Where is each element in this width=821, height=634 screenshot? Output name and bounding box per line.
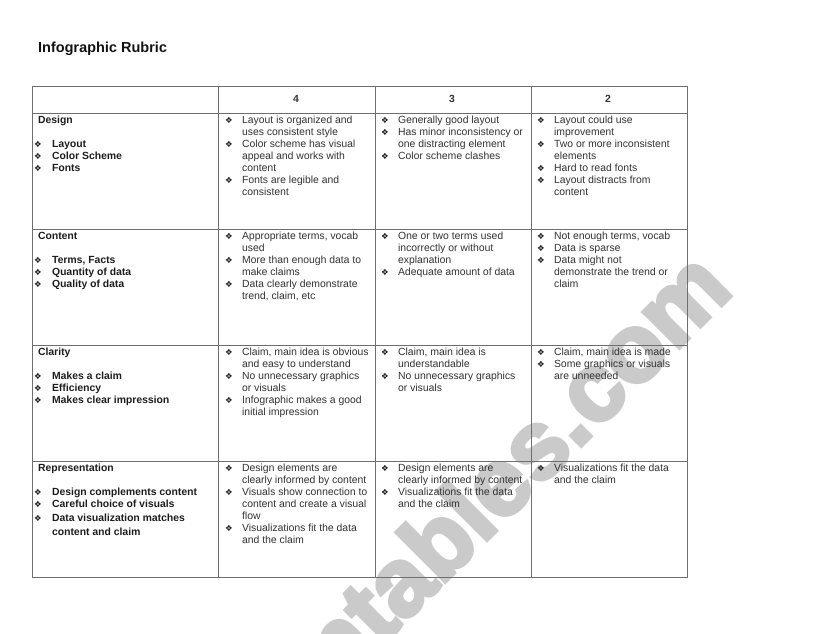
Content score 4: More than enough data to [242,255,361,266]
Content score 3: ❖ [381,268,389,278]
Content score 4: trend, claim, etc [242,291,315,302]
Content score 4: Data clearly demonstrate [242,279,358,290]
Design score 4: content [242,163,276,174]
Content score 3: ❖ [381,232,389,242]
Content score 2: claim [554,279,578,290]
Content score 2 [537,231,670,290]
Design score 4 [225,115,355,198]
row label: Representation: Design complements content [52,487,197,498]
row label: Content [34,231,132,290]
Representation score 2: Visualizations fit the data [554,463,669,474]
Representation score 4: ❖ [225,524,233,534]
row label: Clarity: ❖ [34,384,42,394]
Clarity score 2: Claim, main idea is made [554,347,671,358]
Clarity score 2: ❖ [537,348,545,358]
title: Infographic Rubric [38,40,167,56]
Clarity score 4: Infographic makes a good [242,395,362,406]
Design score 3: ❖ [381,128,389,138]
Content score 4: ❖ [225,232,233,242]
Clarity score 2: are unneeded [554,371,618,382]
Content score 4: Appropriate terms, vocab [242,231,358,242]
Design score 2: Layout could use [554,115,633,126]
row label: Content: Quantity of data [52,267,131,278]
row label: Representation: Data visualization matches [52,513,185,524]
column header 4: 4 [293,94,299,105]
row label: Clarity: Makes clear impression [52,395,169,406]
Clarity score 3: ❖ [381,372,389,382]
Clarity score 3: Claim, main idea is [398,347,486,358]
Content score 3: explanation [398,255,451,266]
row label: Representation: ❖ [34,500,42,510]
row label: Content: Content [38,231,77,242]
row label: Clarity [34,347,169,406]
Design score 4: ❖ [225,140,233,150]
row label: Clarity: ❖ [34,396,42,406]
Clarity score 2 [537,347,671,382]
Content score 2: ❖ [537,232,545,242]
Design score 2: ❖ [537,176,545,186]
Design score 3: one distracting element [398,139,505,150]
Representation score 3: Visualizations fit the data [398,487,513,498]
row label: Design: Fonts [52,163,80,174]
Content score 3: One or two terms used [398,231,503,242]
Content score 2: ❖ [537,244,545,254]
Design score 4: Fonts are legible and [242,175,339,186]
Representation score 3: ❖ [381,488,389,498]
Design score 4: ❖ [225,116,233,126]
Design score 4: ❖ [225,176,233,186]
Clarity score 4: initial impression [242,407,319,418]
Representation score 4 [225,463,367,546]
Design score 2 [537,115,670,198]
Clarity score 4: ❖ [225,396,233,406]
Representation score 4: clearly informed by content [242,475,366,486]
row label: Representation: Representation [38,463,114,474]
Content score 3: Adequate amount of data [398,267,515,278]
Content score 2: ❖ [537,256,545,266]
Content score 4 [225,231,361,302]
Clarity score 3: ❖ [381,348,389,358]
Representation score 4: Design elements are [242,463,337,474]
Clarity score 2: Some graphics or visuals [554,359,670,370]
Clarity score 4: ❖ [225,348,233,358]
Representation score 3: clearly informed by content [398,475,522,486]
Representation score 4: Visualizations fit the data [242,523,357,534]
Design score 2: Layout distracts from [554,175,650,186]
row label: Content: Terms, Facts [52,255,115,266]
row label: Design: ❖ [34,140,42,150]
Representation score 4: flow [242,511,260,522]
row label: Design: ❖ [34,152,42,162]
Design score 2: improvement [554,127,614,138]
Representation score 4: and the claim [242,535,304,546]
Design score 4: uses consistent style [242,127,338,138]
Design score 2: ❖ [537,116,545,126]
Design score 3: ❖ [381,116,389,126]
Design score 3: Has minor inconsistency or [398,127,523,138]
Design score 2: content [554,187,588,198]
row label: Representation: Careful choice of visuals [52,499,174,510]
row label: Representation: ❖ [34,514,42,524]
Content score 4: ❖ [225,280,233,290]
column header 3: 3 [449,94,455,105]
Design score 3: Color scheme clashes [398,151,500,162]
Content score 2: demonstrate the trend or [554,267,668,278]
Content score 4: make claims [242,267,300,278]
Design score 2: Two or more inconsistent [554,139,670,150]
rubric table [32,86,688,578]
Design score 2: ❖ [537,164,545,174]
Representation score 4: ❖ [225,488,233,498]
row label: Representation [34,463,197,538]
Design score 3: Generally good layout [398,115,499,126]
Clarity score 4: and easy to understand [242,359,351,370]
Design score 4: Color scheme has visual [242,139,355,150]
Representation score 3: Design elements are [398,463,493,474]
Design score 4: Layout is organized and [242,115,352,126]
row label: Clarity: Efficiency [52,383,101,394]
Clarity score 2: ❖ [537,360,545,370]
row label: Content: ❖ [34,268,42,278]
row label: Clarity: Makes a claim [52,371,122,382]
row label: Design [34,115,122,174]
row label: Content: ❖ [34,280,42,290]
row label: Content: ❖ [34,256,42,266]
Content score 3: incorrectly or without [398,243,493,254]
Representation score 3: ❖ [381,464,389,474]
Representation score 4: Visuals show connection to [242,487,367,498]
row label: Content: Quality of data [52,279,124,290]
row label: Design: ❖ [34,164,42,174]
Clarity score 4: ❖ [225,372,233,382]
Representation score 3: and the claim [398,499,460,510]
Representation score 2: ❖ [537,464,545,474]
Content score 2: Data might not [554,255,622,266]
Design score 2: Hard to read fonts [554,163,637,174]
Content score 4: ❖ [225,256,233,266]
Clarity score 4: No unnecessary graphics [242,371,359,382]
row label: Design: Design [38,115,73,126]
row label: Representation: ❖ [34,488,42,498]
Design score 4: consistent [242,187,289,198]
Clarity score 3: No unnecessary graphics [398,371,515,382]
Clarity score 3: or visuals [398,383,442,394]
Design score 3 [381,115,523,162]
Content score 2: Data is sparse [554,243,620,254]
column header 2: 2 [605,94,611,105]
Representation score 2 [537,463,669,486]
Design score 2: elements [554,151,596,162]
Content score 3 [381,231,515,278]
row label: Representation: content and claim [52,527,140,538]
Design score 3: ❖ [381,152,389,162]
Content score 2: Not enough terms, vocab [554,231,670,242]
Content score 4: used [242,243,265,254]
row label: Design: Layout [52,139,86,150]
row label: Clarity: ❖ [34,372,42,382]
Design score 4: appeal and works with [242,151,345,162]
Representation score 4: content and create a visual [242,499,366,510]
Representation score 3 [381,463,522,510]
Representation score 2: and the claim [554,475,616,486]
row label: Clarity: Clarity [38,347,70,358]
Clarity score 4: Claim, main idea is obvious [242,347,368,358]
Representation score 4: ❖ [225,464,233,474]
row label: Design: Color Scheme [52,151,122,162]
Clarity score 3 [381,347,515,394]
Clarity score 3: understandable [398,359,470,370]
Design score 2: ❖ [537,140,545,150]
Clarity score 4 [225,347,368,418]
Clarity score 4: or visuals [242,383,286,394]
